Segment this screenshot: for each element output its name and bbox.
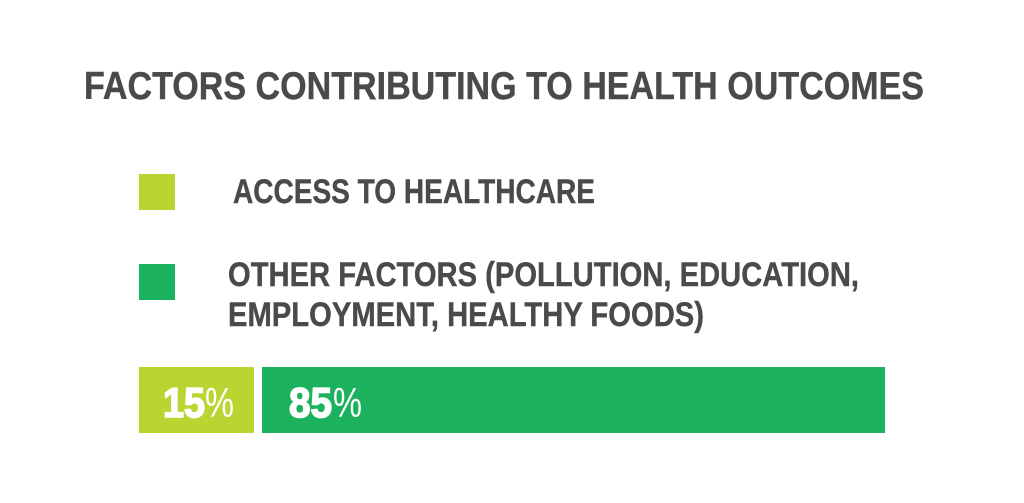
legend label: other factors: OTHER FACTORS (POLLUTION, EDUCATION,: [228, 256, 859, 294]
legend label: access to healthcare: ACCESS TO HEALTHCARE: [233, 173, 595, 211]
bar segment: other factors 85%: %: [333, 379, 362, 426]
legend label: other factors: [228, 256, 859, 334]
bar segment: access to healthcare 15%: [139, 367, 254, 433]
legend swatch: other factors: [139, 264, 175, 300]
bar segment: access to healthcare 15%: %: [205, 379, 234, 426]
bar segment: other factors 85%: 85: [289, 379, 332, 426]
title: FACTORS CONTRIBUTING TO HEALTH OUTCOMES: [84, 65, 924, 108]
bar segment: other factors 85%: [262, 367, 885, 433]
stacked bar chart: [139, 367, 885, 433]
legend label: other factors: EMPLOYMENT, HEALTHY FOODS): [228, 296, 704, 334]
bar segment: access to healthcare 15%: 15: [163, 379, 205, 426]
legend: [139, 173, 859, 334]
legend swatch: access to healthcare: [139, 174, 175, 210]
